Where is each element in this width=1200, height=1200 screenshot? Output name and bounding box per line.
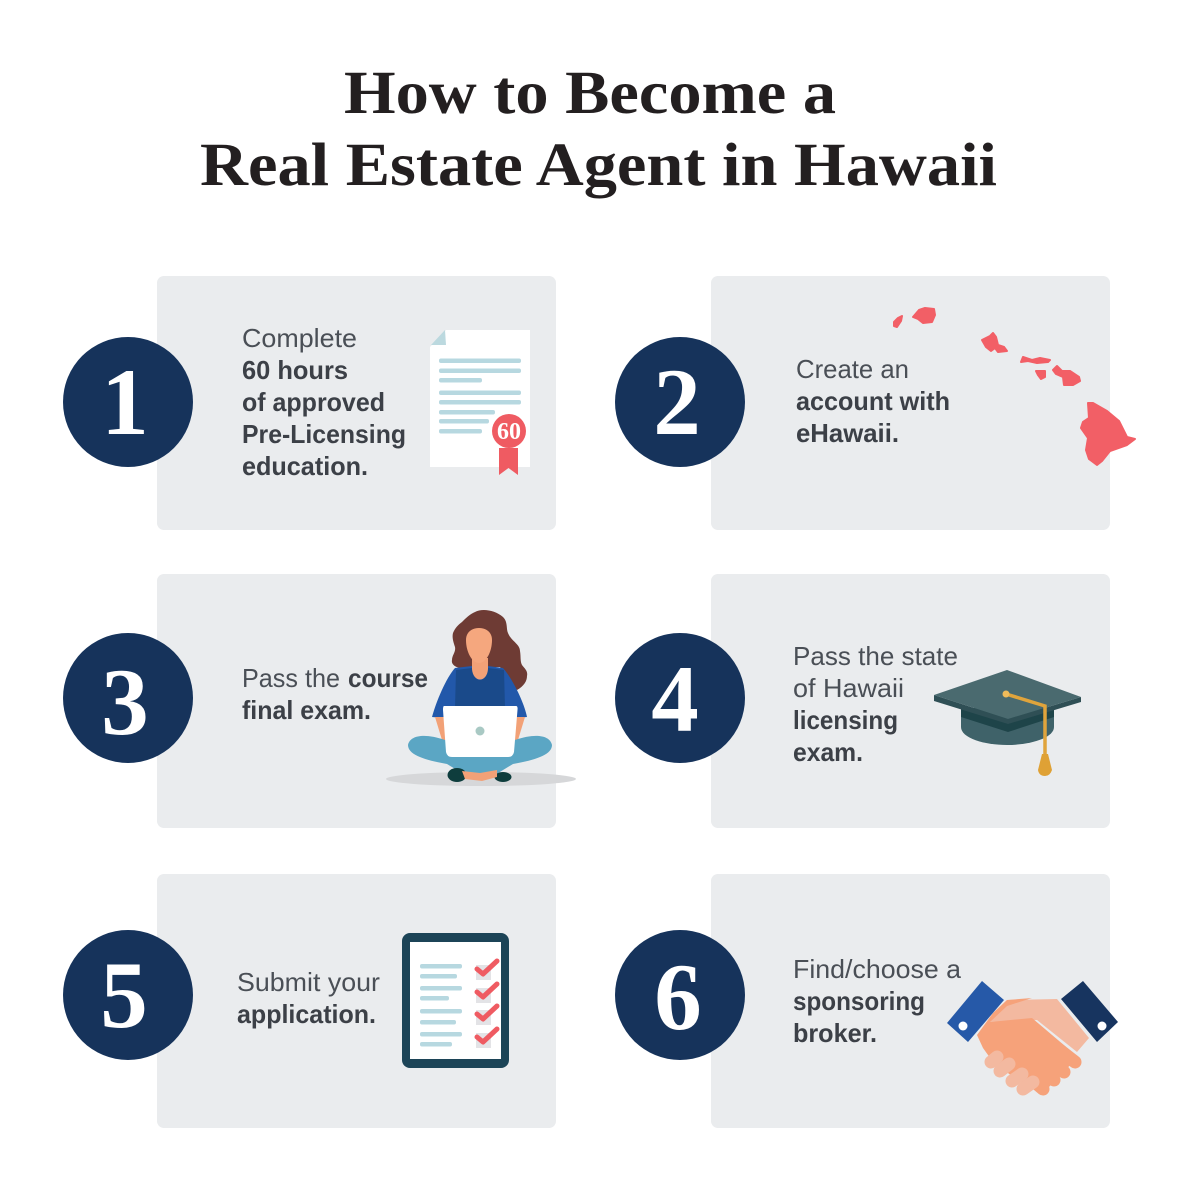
text: step 3: Pass the (242, 663, 340, 693)
text: step 1: of approved (242, 387, 385, 417)
text: step 4: Pass the state (793, 641, 958, 671)
icon: checklist (402, 933, 509, 1068)
title: How to Become a (344, 60, 836, 127)
number badge 3 (63, 633, 193, 763)
title: Real Estate Agent in Hawaii (200, 132, 997, 199)
icon: certificate document (430, 330, 530, 475)
icon: certificate document: 60 (497, 419, 521, 445)
text: step 3 (242, 663, 428, 725)
number badge 3: 3 (101, 649, 149, 755)
number badge 5: 5 (100, 942, 148, 1048)
number badge 5 (63, 930, 193, 1060)
text: step 1: Pre-Licensing (242, 419, 406, 449)
text: step 4 (793, 641, 958, 767)
panel: step 6 (615, 874, 1118, 1128)
icon: handshake (947, 981, 1118, 1089)
panel: step 3 (63, 574, 576, 828)
number badge 6: 6 (654, 944, 702, 1050)
panel: step 2 (615, 276, 1135, 530)
text: step 4: of Hawaii (793, 673, 904, 703)
text: step 6: sponsoring (793, 986, 925, 1016)
text: step 1: Complete (242, 323, 357, 353)
text: step 4: exam. (793, 737, 863, 767)
text: step 3: final exam. (242, 695, 371, 725)
number badge 1: 1 (101, 349, 149, 455)
text: step 2: Create an (796, 354, 909, 384)
text: step 3: course (348, 663, 428, 693)
text: step 5: Submit your (237, 967, 380, 997)
text: step 2: account with (796, 386, 950, 416)
text: step 6: Find/choose a (793, 954, 962, 984)
number badge 1 (63, 337, 193, 467)
number badge 4: 4 (651, 646, 699, 752)
icon: graduation cap (934, 670, 1081, 776)
icon: Hawaii islands map (894, 308, 1135, 465)
text: step 2: eHawaii. (796, 418, 899, 448)
number badge 2: 2 (653, 349, 701, 455)
text: step 6: broker. (793, 1018, 877, 1048)
panel: step 4 (615, 574, 1110, 828)
text: step 2 (796, 354, 950, 448)
panel: step 1 (63, 276, 556, 530)
text: step 4: licensing (793, 705, 898, 735)
illustration: woman with laptop (386, 610, 576, 786)
text: step 5 (237, 967, 380, 1029)
number badge 4 (615, 633, 745, 763)
text: step 5: application. (237, 999, 376, 1029)
panel: step 5 (63, 874, 556, 1128)
text: step 6 (793, 954, 962, 1048)
text: step 1: 60 hours (242, 355, 348, 385)
title (200, 60, 997, 199)
number badge 6 (615, 930, 745, 1060)
text: step 1: education. (242, 451, 368, 481)
number badge 2 (615, 337, 745, 467)
text: step 1 (242, 323, 406, 481)
